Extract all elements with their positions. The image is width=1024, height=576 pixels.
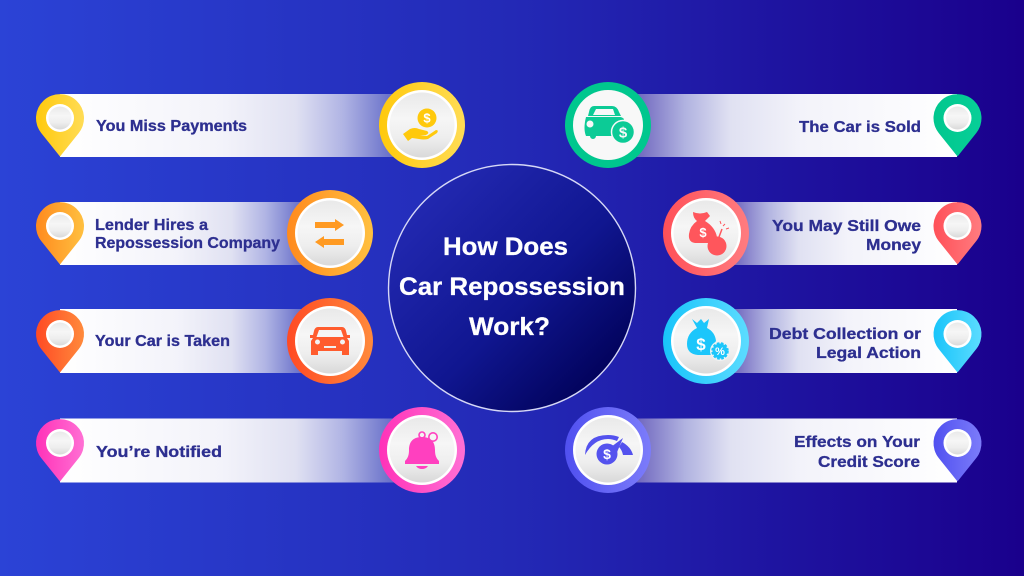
icon: car front [287, 298, 373, 384]
icon: money bag and percent badge: $ [696, 335, 706, 354]
icon: hand with coin: $ [423, 110, 431, 126]
label: You’re Notified [96, 444, 222, 461]
pin [36, 202, 84, 264]
icon: exchange arrows [287, 190, 373, 276]
pin [36, 94, 84, 156]
title: Car Repossession [399, 273, 625, 301]
icon: hand with coin [379, 82, 465, 168]
panel: You're Notified [36, 407, 465, 493]
icon: credit score gauge: $ [603, 446, 611, 462]
label [794, 434, 920, 471]
panel: The Car is Sold [565, 82, 982, 168]
panel: Your Car is Taken [36, 298, 373, 384]
label: Debt Collection or [769, 326, 921, 343]
icon: bell [379, 407, 465, 493]
panel: You May Still Owe Money [663, 190, 982, 276]
title: Work? [469, 313, 550, 341]
title [399, 233, 625, 341]
label: Money [866, 237, 921, 254]
icon: money bag and bomb [663, 190, 749, 276]
icon: money bag and bomb: $ [699, 225, 707, 240]
icon: car with dollar coin: $ [619, 124, 628, 142]
icon: credit score gauge [565, 407, 651, 493]
pin [934, 202, 982, 264]
panel: Debt Collection or Legal Action [663, 298, 982, 384]
label [769, 326, 921, 362]
label [95, 217, 280, 252]
label: Legal Action [816, 345, 921, 362]
label: Repossession Company [95, 235, 280, 252]
label: Your Car is Taken [95, 333, 230, 350]
icon: money bag and percent badge: % [715, 346, 725, 358]
icon: car with dollar coin [565, 82, 651, 168]
pin [934, 419, 982, 482]
title: How Does [443, 233, 568, 261]
label: You Miss Payments [96, 118, 247, 135]
pin [934, 310, 982, 372]
pin [36, 419, 84, 482]
panel: Lender Hires a Repossession Company [36, 190, 373, 276]
pin [36, 310, 84, 372]
label: The Car is Sold [799, 119, 921, 136]
icon: money bag and percent badge [663, 298, 749, 384]
label: Effects on Your [794, 434, 920, 451]
label: You May Still Owe [772, 218, 921, 235]
label [772, 218, 921, 254]
panel: central title circle [388, 164, 636, 412]
panel: Effects on Your Credit Score [565, 407, 982, 493]
label: Credit Score [818, 454, 920, 471]
panel: You Miss Payments [36, 82, 465, 168]
label: Lender Hires a [95, 217, 208, 234]
pin [934, 94, 982, 156]
